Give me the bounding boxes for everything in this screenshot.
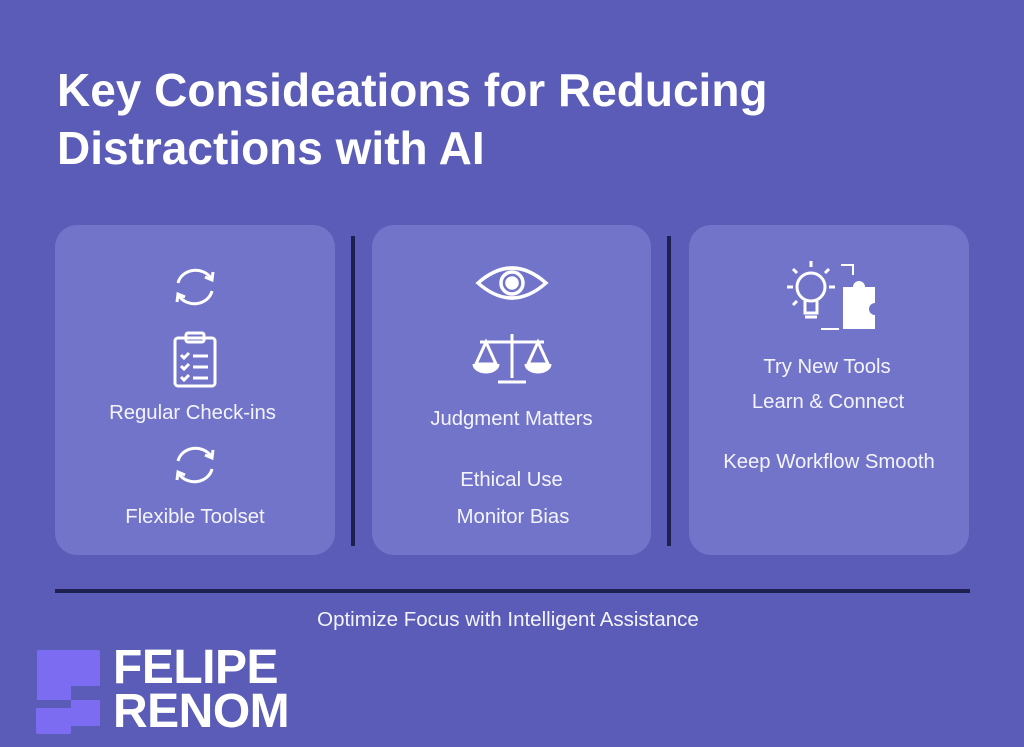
subtitle: Optimize Focus with Intelligent Assistance [317, 608, 699, 631]
text: learn & connect: Learn & Connect [752, 391, 904, 413]
icon: refresh top [176, 268, 214, 306]
logo text: FELIPE [113, 641, 278, 694]
text: ethical use: Ethical Use [460, 469, 563, 491]
logo mark [36, 650, 100, 734]
text: monitor bias: Monitor Bias [457, 506, 569, 528]
title: Key Consideations for Reducing [57, 64, 768, 116]
icon: refresh bottom [176, 446, 214, 484]
panel: middle [372, 225, 651, 555]
icon: eye [476, 266, 548, 300]
icon: scales [472, 334, 552, 384]
text: try new tools: Try New Tools [763, 356, 891, 378]
text: keep workflow smooth: Keep Workflow Smooth [723, 451, 935, 473]
text: judgment matters: Judgment Matters [430, 408, 593, 430]
icon: bulb and puzzle [787, 261, 875, 330]
title: Distractions with AI [57, 122, 485, 174]
logo [36, 641, 289, 738]
icon: clipboard [174, 332, 216, 388]
panel: left [55, 225, 335, 555]
title [57, 64, 768, 174]
logo text [113, 641, 289, 738]
text: regular check-ins: Regular Check-ins [109, 402, 276, 424]
panel: right [689, 225, 969, 555]
logo text: RENOM [113, 685, 289, 738]
text: flexible toolset: Flexible Toolset [125, 506, 265, 528]
